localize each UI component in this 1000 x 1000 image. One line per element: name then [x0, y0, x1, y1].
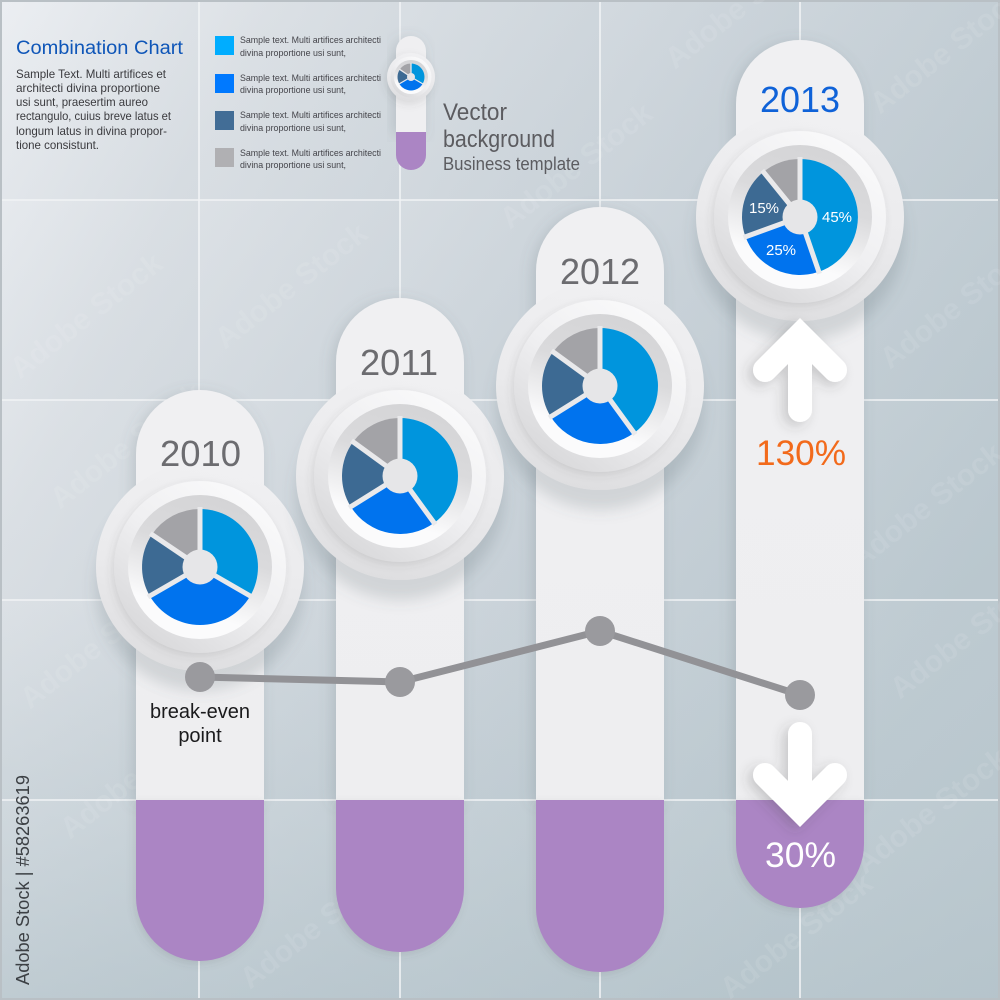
column: 2012: [536, 207, 664, 972]
description text: usi sunt, praesertim aureo: [16, 95, 148, 109]
arrow down: [765, 734, 835, 810]
watermarks: Adobe Stock: [209, 216, 374, 356]
legend item 4: divina proportione usi sunt,: [240, 160, 346, 171]
year label 2013: 2013: [760, 79, 840, 120]
legend item 2: Sample text. Multi artifices architecti: [240, 73, 381, 84]
pie chart 2013: 45%: [822, 209, 852, 226]
legend item 2: [215, 73, 381, 96]
watermarks: Adobe Stock: [4, 246, 169, 386]
legend item 1: Sample text. Multi artifices architecti: [240, 35, 381, 46]
subtitle text: [443, 99, 580, 174]
mini column icon: [387, 36, 435, 170]
pie chart 2012: [496, 282, 704, 490]
break-even label: break-even: [150, 701, 250, 723]
description text: longum latus in divina propor-: [16, 124, 167, 138]
subtitle text: background: [443, 126, 555, 153]
stock id text: Adobe Stock | #58263619: [13, 775, 33, 985]
break-even label: point: [178, 725, 222, 747]
description text: rectangulo, cuius breve latus et: [16, 109, 172, 123]
watermarks: Adobe Stock: [44, 376, 209, 516]
pie chart 2013: 25%: [766, 242, 796, 259]
legend: [215, 35, 381, 171]
legend item 4: [215, 148, 381, 171]
pie chart 2010: [96, 463, 304, 671]
year label 2010: 2010: [160, 433, 241, 474]
year label 2012: 2012: [560, 251, 640, 292]
pie chart 2011: [296, 372, 504, 580]
legend item 4: Sample text. Multi artifices architecti: [240, 148, 381, 159]
decline value 30%: 30%: [765, 836, 836, 875]
description text: [16, 67, 172, 152]
legend item 3: Sample text. Multi artifices architecti: [240, 110, 381, 121]
description text: tione consistunt.: [16, 138, 99, 152]
legend item 3: [215, 110, 381, 134]
growth value 130%: 130%: [756, 434, 846, 473]
column: 2010: [136, 390, 264, 961]
legend item 3: divina proportione usi sunt,: [240, 123, 346, 134]
watermarks: Adobe Stock: [54, 706, 219, 846]
pie chart 2013: [696, 113, 904, 321]
description text: architecti divina proportione: [16, 81, 160, 95]
year label 2011: 2011: [360, 342, 438, 383]
legend item 2: divina proportione usi sunt,: [240, 85, 346, 96]
watermarks: Adobe Stock: [494, 96, 659, 236]
pie chart 2013: 15%: [749, 200, 779, 217]
legend item 1: [215, 35, 381, 59]
watermarks: Adobe Stock: [234, 856, 399, 996]
column: 2011: [336, 298, 464, 952]
line chart: [185, 616, 815, 710]
subtitle text: Vector: [443, 99, 507, 126]
subtitle text: Business template: [443, 154, 580, 174]
legend item 1: divina proportione usi sunt,: [240, 48, 346, 59]
title: Combination Chart: [16, 38, 184, 59]
watermarks: Adobe Stock: [14, 576, 179, 716]
arrow up: [765, 335, 835, 410]
description text: Sample Text. Multi artifices et: [16, 67, 167, 81]
column: 2013: [736, 40, 864, 908]
